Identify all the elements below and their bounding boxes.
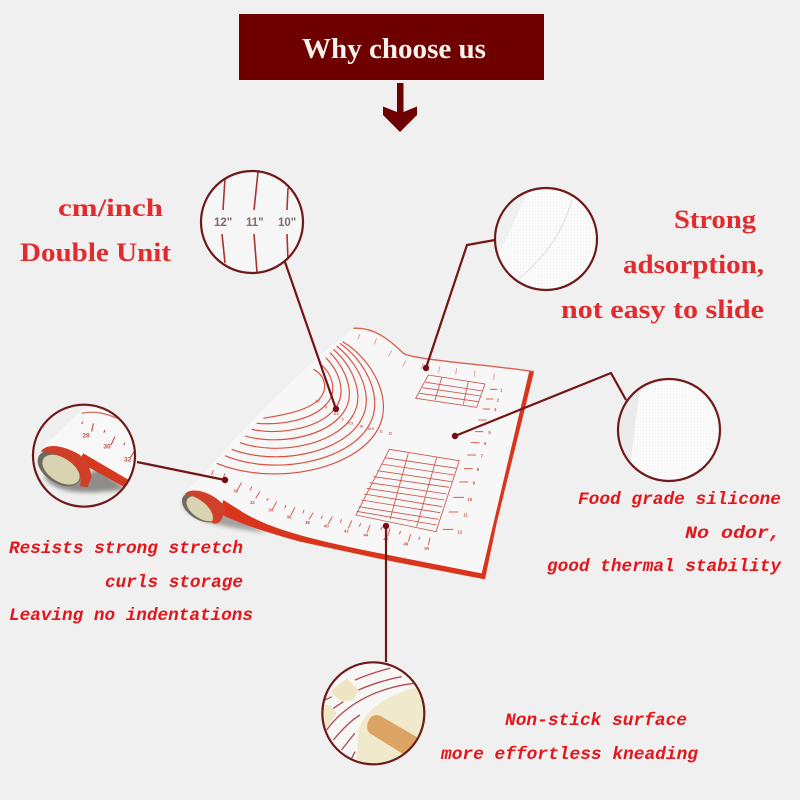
silicone mat: 10 <box>467 497 473 502</box>
mat red border <box>220 371 534 579</box>
roll <box>177 486 226 529</box>
silicone mat: 7 <box>481 453 484 458</box>
bottom ruler numbers: 42 <box>344 529 349 534</box>
top ruler ticks <box>358 334 494 380</box>
bottom ruler numbers: 40 <box>324 524 329 529</box>
circle: dough detail <box>322 662 425 764</box>
bottom ruler ticks <box>212 470 430 545</box>
connector: non-stick circle <box>383 523 389 662</box>
arrow: down <box>383 83 417 132</box>
heading: strong adsorption: Strong <box>674 205 756 234</box>
circle: adsorption texture <box>495 188 597 290</box>
heading: strong adsorption: adsorption, <box>623 250 764 279</box>
circle: inch scale detail: 10" <box>278 217 296 229</box>
title banner: Why choose us <box>302 34 486 65</box>
connector: food grade circle <box>452 373 626 439</box>
text: food grade silicone <box>547 490 783 577</box>
text: non-stick surface: more effortless kneading <box>440 745 699 765</box>
text: food grade silicone: good thermal stability <box>547 557 783 577</box>
ruler numbers: 28 <box>82 432 90 439</box>
mat top edge <box>353 328 534 372</box>
connector: adsorption circle <box>423 240 495 371</box>
radius labels: 9 <box>342 417 344 421</box>
ruler numbers: 30 <box>103 444 111 451</box>
circle: roll detail <box>31 403 140 507</box>
connector: unit circle <box>285 262 339 412</box>
circle: inch scale detail <box>201 171 303 273</box>
red edge <box>82 453 128 486</box>
radius labels: 12 <box>388 431 392 435</box>
heading: strong adsorption <box>561 205 764 324</box>
radius labels: 11 <box>379 430 383 434</box>
text: food grade silicone: No odor, <box>685 524 781 544</box>
bottom ruler numbers: 30 <box>233 489 239 494</box>
silicone mat: 1 <box>500 387 503 392</box>
text: food grade silicone: Food grade silicone <box>578 490 781 510</box>
large table <box>356 449 459 532</box>
guide lines <box>325 668 414 758</box>
radius labels <box>315 400 392 435</box>
small table <box>416 375 485 407</box>
mat shadow <box>182 502 267 533</box>
circle: food grade texture <box>618 379 720 481</box>
kneading circles <box>217 342 383 474</box>
circle: inch scale detail: 11" <box>246 217 264 229</box>
bottom ruler numbers: 34 <box>268 508 274 513</box>
title banner <box>239 14 544 80</box>
silicone mat: 9 <box>473 481 476 486</box>
silicone mat: 11 <box>463 513 468 518</box>
radius labels: 8.5 <box>334 412 339 416</box>
text: non-stick surface: Non-stick surface <box>505 711 687 731</box>
right ruler ticks and numbers <box>443 389 497 529</box>
text: resists stretch <box>9 539 253 626</box>
radius labels: 10 <box>359 425 363 429</box>
radius labels: 9.5 <box>348 422 353 426</box>
dough pieces <box>330 678 358 702</box>
shadow <box>43 468 127 492</box>
bottom ruler numbers: 44 <box>363 533 369 538</box>
heading: cm/inch double unit: Double Unit <box>20 238 171 267</box>
bottom ruler numbers: 36 <box>287 514 292 519</box>
roll end <box>38 452 80 486</box>
circle: inch scale detail: 12" <box>214 217 232 229</box>
radius labels: 7.5 <box>315 400 320 404</box>
silicone mat: 12 <box>457 529 463 534</box>
silicone mat <box>177 328 534 579</box>
heading: strong adsorption: not easy to slide <box>561 295 764 324</box>
silicone mat: 2 <box>497 397 500 402</box>
bottom ruler numbers: 50 <box>424 546 430 551</box>
ruler ticks <box>82 422 135 457</box>
bottom ruler numbers: 46 <box>383 537 389 542</box>
bottom ruler numbers <box>233 489 430 551</box>
text: resists stretch: Resists strong stretch <box>9 539 243 559</box>
silicone mat: 6 <box>484 441 487 446</box>
bottom ruler numbers: 32 <box>250 500 255 505</box>
ruler numbers: 32 <box>124 457 132 464</box>
text: non-stick surface <box>440 711 699 765</box>
radius labels: 8 <box>325 405 327 409</box>
connector: stretch circle <box>137 462 228 483</box>
rolling pin <box>367 715 417 757</box>
heading: cm/inch double unit: cm/inch <box>58 195 163 222</box>
silicone mat: 5 <box>488 430 491 435</box>
dough sheet <box>357 685 425 763</box>
ruler numbers <box>82 432 132 464</box>
text: resists stretch: Leaving no indentations <box>9 606 253 626</box>
radius labels: 10.5 <box>367 427 374 431</box>
bottom ruler numbers: 48 <box>403 541 409 546</box>
silicone mat: 8 <box>477 467 480 472</box>
bottom ruler numbers: 38 <box>305 520 310 525</box>
silicone mat: 3 <box>494 407 497 412</box>
text: resists stretch: curls storage <box>105 573 243 593</box>
heading: cm/inch double unit <box>20 195 171 267</box>
sheet <box>40 406 134 479</box>
mat sheet <box>187 328 534 578</box>
